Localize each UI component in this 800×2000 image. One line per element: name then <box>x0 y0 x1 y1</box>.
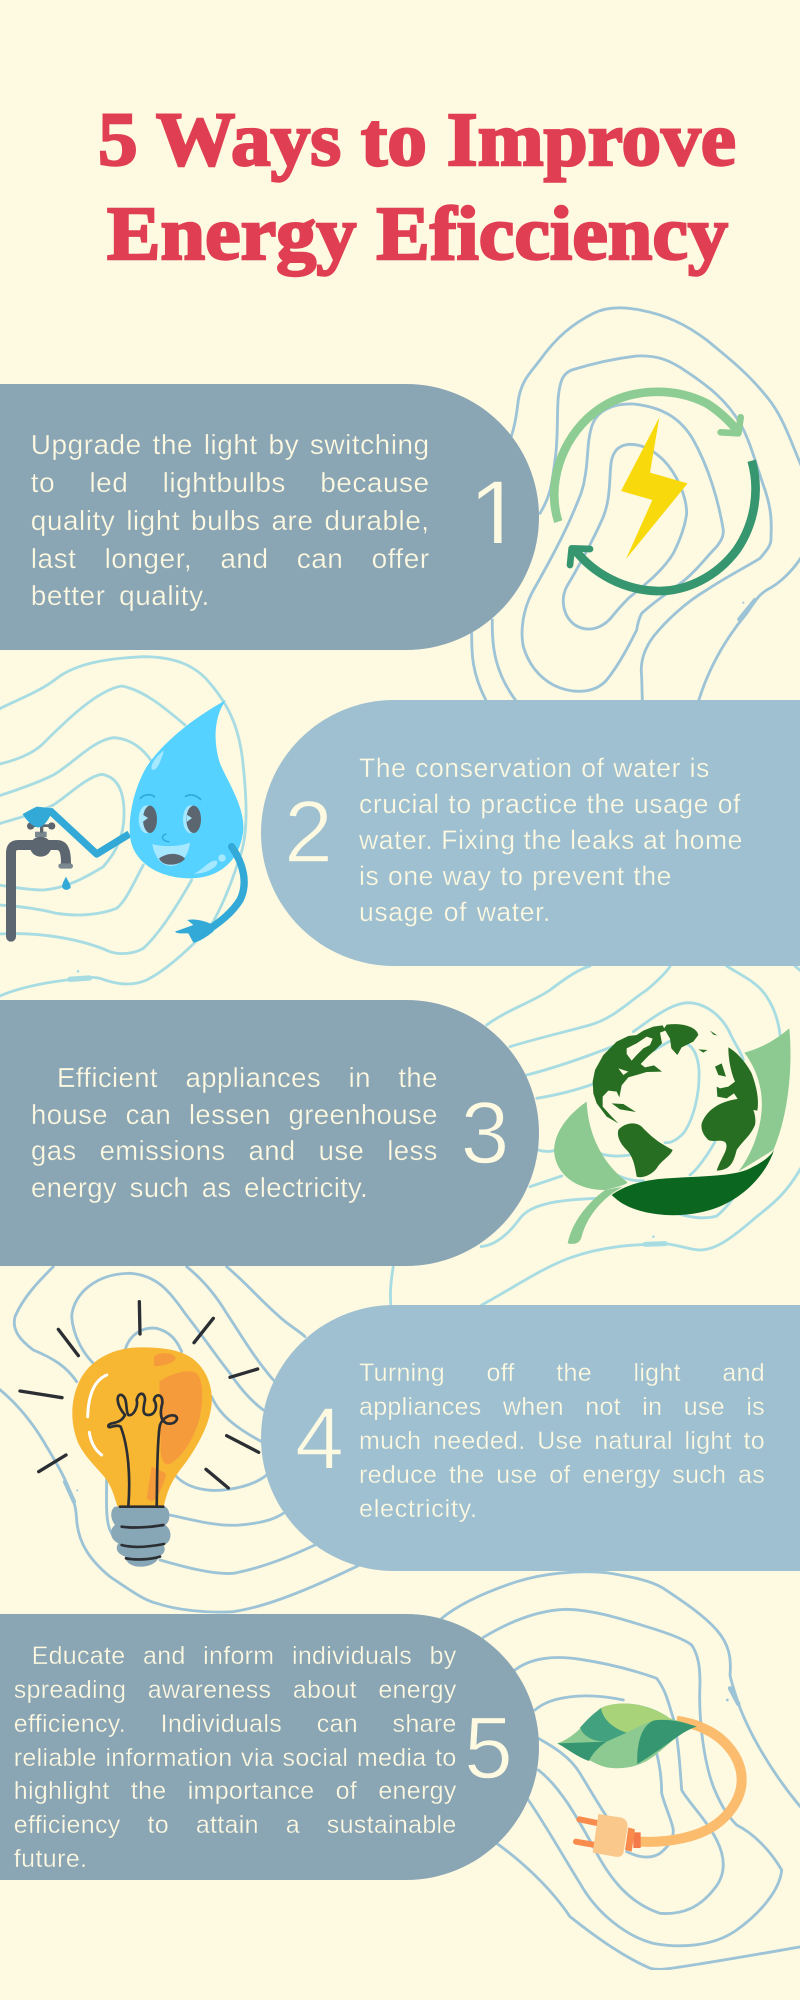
step 5 text: Educate and inform individuals by <box>32 1642 457 1670</box>
step 3 text: energy such as electricity. <box>31 1172 368 1203</box>
illustration 5: contours and leaf plug <box>440 1571 800 1970</box>
illustration 1: contours and energy icon <box>470 306 800 700</box>
step 2 text: usage of water. <box>359 897 551 927</box>
step 1 text: quality light bulbs are durable, <box>31 505 430 536</box>
step 4 text <box>359 1359 765 1523</box>
contour lines 2 <box>0 657 246 997</box>
title <box>98 98 736 278</box>
step 2 text: water. Fixing the leaks at home <box>359 825 743 855</box>
illustration 4: contours and light bulb <box>0 1266 360 1614</box>
illustration 2: contours and water drop at faucet <box>0 655 248 998</box>
icon: leaf with plug cord <box>557 1703 742 1857</box>
panel: step 5 <box>0 1614 539 1880</box>
step 4 text: electricity. <box>359 1495 478 1523</box>
step 1 text: better quality. <box>31 580 210 611</box>
step 2 text: The conservation of water is <box>359 753 710 783</box>
step 4 text: much needed. Use natural light to <box>359 1427 765 1455</box>
panel: step 2 <box>261 700 800 966</box>
icon: light bulb with rays <box>20 1302 259 1567</box>
panel: step 1 <box>0 384 539 650</box>
step 5 text <box>14 1642 457 1873</box>
step 2 text <box>359 753 743 927</box>
title: 5 Ways to Improve <box>98 98 736 182</box>
title: Energy Eficciency <box>107 192 728 276</box>
step 4 text: Turning off the light and <box>359 1359 765 1387</box>
step 2 text: crucial to practice the usage of <box>359 789 741 819</box>
step 2 text: is one way to prevent the <box>359 861 672 891</box>
icon: energy cycle arrows and lightning bolt <box>554 392 756 591</box>
step 3 text: Efficient appliances in the <box>57 1062 438 1093</box>
contour lines 3 <box>478 966 800 1305</box>
step 1 text: Upgrade the light by switching <box>31 429 430 460</box>
contour segment between panels 3 and 4 <box>389 1266 395 1306</box>
step 1 text <box>31 429 430 611</box>
step 1 text: to led lightbulbs because <box>31 467 430 498</box>
step 5 text: spreading awareness about energy <box>14 1676 457 1704</box>
contour lines 1 <box>472 308 800 702</box>
step 1 text: last longer, and can offer <box>31 543 430 574</box>
step 5 text: efficiency. Individuals can share <box>14 1710 457 1738</box>
step 3 text <box>31 1062 438 1203</box>
icon: water drop character <box>23 700 244 943</box>
icon: globe and leaves <box>554 1024 790 1244</box>
illustration 3: contours and globe with leaves <box>480 966 800 1305</box>
step 4 text: reduce the use of energy such as <box>359 1461 765 1489</box>
step 5 text: highlight the importance of energy <box>14 1777 457 1805</box>
contour lines 4 <box>0 1267 383 1612</box>
panel: step 3 <box>0 1000 539 1266</box>
panel: step 4 <box>261 1305 800 1571</box>
step 3 text: gas emissions and use less <box>31 1135 438 1166</box>
step 4 text: appliances when not in use is <box>359 1393 765 1421</box>
icon: faucet <box>11 819 73 937</box>
step 3 text: house can lessen greenhouse <box>31 1098 438 1130</box>
step 5 text: reliable information via social media to <box>14 1744 457 1772</box>
step 5 text: future. <box>14 1845 87 1873</box>
contour lines 5 <box>442 1572 800 1969</box>
step 5 text: efficiency to attain a sustainable <box>14 1811 457 1839</box>
